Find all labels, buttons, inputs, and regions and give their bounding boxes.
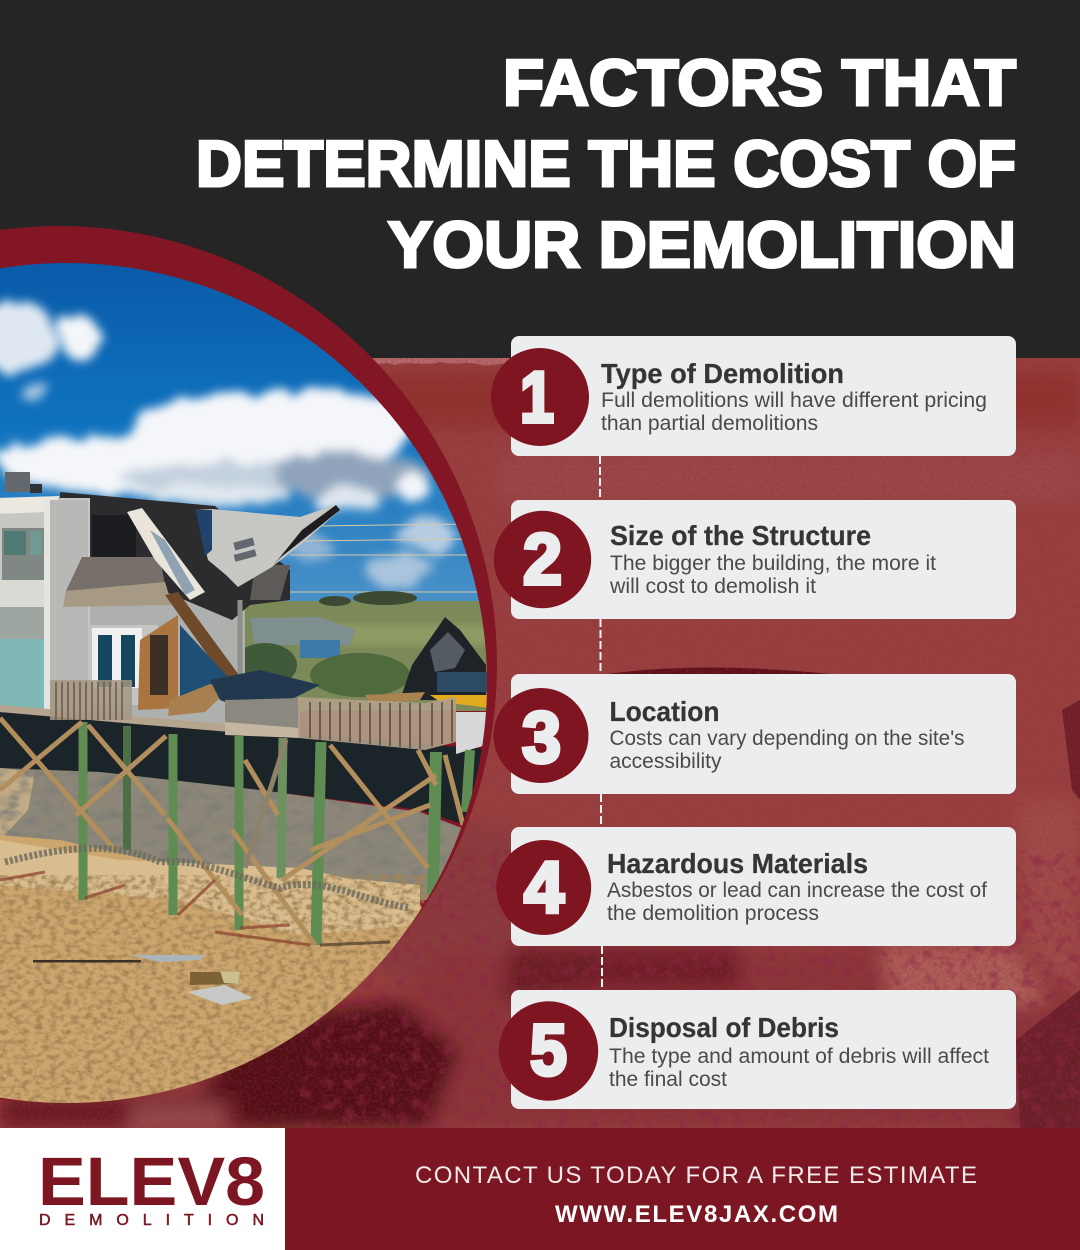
fallen wall panel	[127, 508, 205, 600]
panel: factor 4: 4	[524, 848, 564, 928]
dunes and trees	[233, 591, 500, 711]
clouds	[0, 299, 455, 584]
panel: factor 3	[494, 674, 1016, 794]
panel: factor 5: the final cost	[609, 1068, 727, 1091]
title	[196, 46, 1016, 281]
panel: factor 2	[494, 500, 1016, 619]
maroon circle ring behind photo	[0, 226, 497, 1103]
panel: factor 2: will cost to demolish it	[609, 575, 816, 598]
panel: factor 5: The type and amount of debris will affect	[609, 1045, 989, 1068]
panel: factor 2: The bigger the building, the more it	[610, 552, 936, 575]
panel: factor 5	[499, 990, 1016, 1109]
logo: Elev8 Demolition: DEMOLITION	[39, 1212, 264, 1229]
panel: factor 4: Asbestos or lead can increase the cost of	[607, 879, 987, 902]
panel: factor 5: 5	[530, 1011, 567, 1091]
footer bar	[285, 1128, 1080, 1250]
panel: factor 4: Hazardous Materials	[607, 848, 868, 879]
exposed framing	[60, 492, 290, 620]
title: YOUR DEMOLITION	[388, 208, 1016, 281]
house facade	[0, 472, 158, 715]
broken timber	[138, 592, 250, 710]
panel: factor 3: Location	[610, 696, 720, 727]
panel: factor 1	[491, 336, 1016, 456]
green support piles	[83, 722, 470, 945]
panel: factor 4: the demolition process	[607, 902, 819, 925]
panel: factor 1: Full demolitions will have different pricing	[601, 389, 987, 412]
panel: factor 3: 3	[522, 698, 561, 778]
panel: factor 3: Costs can vary depending on the site's	[610, 727, 964, 750]
debris on sand	[33, 955, 253, 1005]
torn roof sheet	[196, 505, 340, 587]
panel: factor 1: than partial demolitions	[601, 412, 818, 435]
excavated sand bank	[0, 765, 480, 905]
panel: factor 2: 2	[523, 520, 562, 600]
underside of the house	[0, 712, 500, 830]
photo: damaged beach house on stilts	[0, 260, 500, 1110]
dashed connector line	[600, 456, 602, 990]
panel: factor 1: Type of Demolition	[601, 358, 844, 389]
dark header background	[0, 0, 1080, 358]
panel: factor 1: 1	[520, 358, 554, 438]
panel: factor 3: accessibility	[610, 750, 722, 773]
sky	[0, 260, 500, 620]
excavator	[400, 617, 490, 708]
awning	[63, 557, 172, 607]
title: DETERMINE THE COST OF	[196, 127, 1016, 200]
fence and shadows	[0, 848, 410, 945]
call to action text: WWW.ELEV8JAX.COM	[555, 1201, 838, 1228]
panel: factor 2: Size of the Structure	[610, 520, 871, 551]
power lines	[285, 524, 480, 592]
beach sand	[0, 835, 440, 1103]
debris pile on deck	[168, 670, 425, 730]
title: FACTORS THAT	[503, 46, 1016, 119]
logo: Elev8 Demolition	[0, 1128, 285, 1250]
wooden cross braces	[0, 718, 463, 945]
logo: Elev8 Demolition: ELEV8	[38, 1143, 265, 1220]
call to action text: CONTACT US TODAY FOR A FREE ESTIMATE	[415, 1162, 977, 1189]
panel: factor 4	[496, 827, 1016, 946]
panel: factor 5: Disposal of Debris	[609, 1012, 839, 1043]
call to action text	[415, 1162, 977, 1228]
house wall behind debris	[90, 593, 245, 724]
deck and balconies	[0, 680, 486, 754]
red textured background	[0, 350, 1080, 1129]
